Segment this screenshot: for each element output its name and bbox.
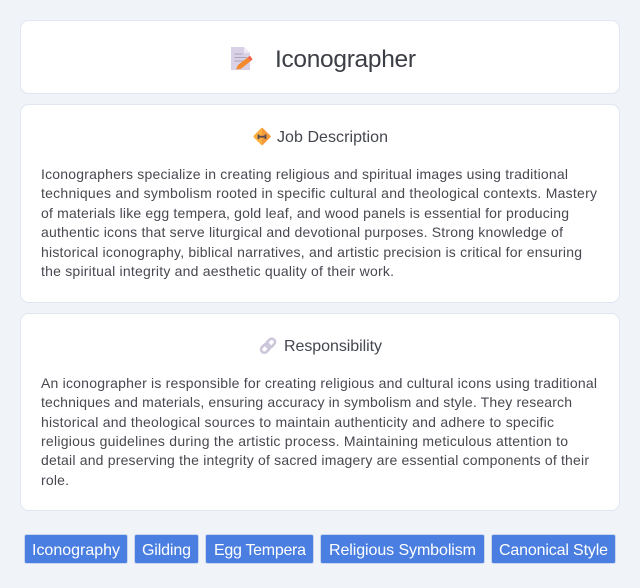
text block: job description: of materials like egg tempera, gold leaf, and wood panels is essential for producing: [41, 205, 569, 221]
tag: Gilding: Gilding: [142, 542, 191, 559]
text block: responsibility: [41, 375, 597, 488]
tag row: [24, 534, 616, 564]
text block: responsibility: techniques and materials, ensuring accuracy in symbolism and style. They research: [41, 394, 572, 410]
panel: job description: [20, 104, 620, 302]
text block: job description: [41, 166, 597, 279]
tag: Religious Symbolism: [320, 534, 484, 564]
tag: Egg Tempera: Egg Tempera: [214, 542, 306, 559]
text block: responsibility: An iconographer is responsible for creating religious and cultural icons using traditional: [41, 375, 597, 391]
panel: title card: [20, 20, 620, 94]
text block: responsibility: historical and theological sources to maintain authenticity and adhere to specific: [41, 414, 554, 430]
icon: diamond sign: [253, 127, 271, 146]
text block: job description: the spiritual integrity and aesthetic quality of their work.: [41, 263, 394, 279]
tag: Religious Symbolism: Religious Symbolism: [329, 542, 476, 559]
icon: chain link: [260, 337, 276, 354]
text block: responsibility: detail and preserving the integrity of sacred imagery are essential components of their: [41, 452, 589, 468]
heading: responsibility: Responsibility: [284, 338, 382, 355]
tag: Egg Tempera: [206, 534, 314, 564]
tag: Gilding: [134, 534, 198, 564]
tag: Canonical Style: Canonical Style: [499, 542, 608, 559]
panel: responsibility: [20, 314, 620, 510]
text block: job description: Iconographers specialize in creating religious and spiritual images using traditional: [41, 166, 568, 182]
heading: job description: Job Description: [277, 129, 388, 146]
icon: document with pencil: [231, 47, 253, 70]
text block: job description: authentic icons that serve liturgical and devotional purposes. Strong knowledge of: [41, 224, 563, 240]
tag: Iconography: Iconography: [32, 542, 120, 559]
text block: responsibility: religious guidelines during the artistic process. Maintaining meticulous attention to: [41, 433, 568, 449]
text block: job description: historical iconography, biblical narratives, and artistic precision is critical for ensuring: [41, 244, 582, 260]
text block: responsibility: role.: [41, 472, 69, 488]
title: Iconographer: [275, 46, 416, 73]
text block: job description: techniques and symbolism rooted in specific cultural and theological contexts. Mastery: [41, 185, 597, 201]
tag: Canonical Style: [492, 534, 616, 564]
tag: Iconography: [24, 534, 128, 564]
